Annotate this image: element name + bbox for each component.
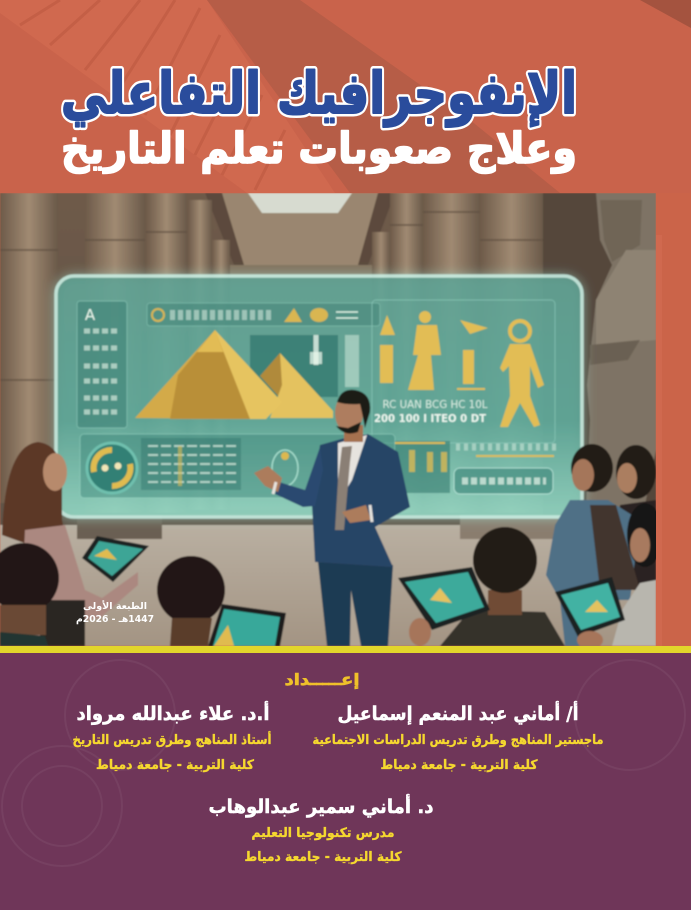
- title line 1 heavy fill: الإنفوجرافيك التفاعلي: [61, 61, 577, 128]
- student: boy bottom left: [0, 543, 59, 646]
- temple background: [0, 193, 544, 526]
- hair and beard: [336, 390, 370, 434]
- author 3: [208, 794, 434, 865]
- shirt: [336, 434, 368, 488]
- small glyph column: [310, 335, 359, 387]
- hieroglyph figures panel: [372, 300, 555, 443]
- left data column: [77, 301, 127, 428]
- student: boy centre with tablet: [157, 556, 286, 646]
- pedestal shadows: [77, 515, 563, 539]
- trousers: [318, 562, 393, 646]
- circular gauge: [87, 443, 137, 493]
- edition note: الطبعة الأولى: [83, 600, 147, 612]
- author 2: كلية التربية - جامعة دمياط: [96, 758, 254, 773]
- title: [61, 61, 577, 174]
- author 1: [312, 701, 604, 773]
- author 1: كلية التربية - جامعة دمياط: [380, 758, 538, 773]
- table of numbers: [374, 398, 488, 425]
- left data column: A: [85, 306, 96, 324]
- tablet left: [82, 536, 149, 582]
- head: [334, 401, 364, 428]
- bottom strip right: [395, 441, 556, 494]
- students: right group with tablet: [546, 444, 663, 649]
- glowing holographic screen: [54, 275, 584, 519]
- left arm pointing: [275, 447, 323, 507]
- illustration: teacher in Egyptian temple: [0, 193, 663, 649]
- author 2: [72, 701, 272, 773]
- title line 2: وعلاج صعوبات تعلم التاريخ: [61, 124, 577, 174]
- neck: [344, 425, 363, 442]
- pointing hand: [254, 466, 282, 492]
- student: girl left with tablet: [2, 442, 138, 646]
- author 3: كلية التربية - جامعة دمياط: [244, 850, 402, 865]
- lower hand: [342, 505, 371, 523]
- author 3: مدرس تكنولوجيا التعليم: [252, 826, 394, 841]
- large and small gold pyramids: [135, 330, 333, 419]
- jacket: [312, 434, 410, 567]
- floor: [0, 525, 656, 646]
- yellow divider band: [0, 646, 691, 653]
- author 2: أستاذ المناهج وطرق تدريس التاريخ: [72, 731, 272, 748]
- gold Egyptian figures: [380, 311, 544, 427]
- top strip: [147, 303, 380, 326]
- author 3: د. أماني سمير عبدالوهاب: [208, 794, 434, 818]
- table of numbers: RC UAN BCG HC 10L: [382, 398, 488, 411]
- edition note: 1447هـ - 2026م: [76, 614, 154, 625]
- title line 1: الإنفوجرافيك التفاعلي: [61, 61, 577, 128]
- student: boy right with tablet: [398, 527, 565, 646]
- table of numbers: 200 100 I ITEO 0 DT: [374, 412, 486, 425]
- author 1: أ/ أماني عبد المنعم إسماعيل: [338, 701, 578, 725]
- dark inset behind small pyramid: [250, 335, 338, 397]
- teacher: [254, 390, 410, 646]
- purple authors panel: [0, 653, 691, 910]
- bottom strip left with gauge: [80, 434, 395, 498]
- cuffs: [273, 482, 372, 522]
- edition note: [76, 600, 154, 625]
- prepared by label: إعـــــداد: [284, 670, 360, 689]
- author 2: أ.د. علاء عبدالله مرواد: [76, 701, 270, 725]
- author 1: ماجستير المناهج وطرق تدريس الدراسات الاجتماعية: [312, 733, 604, 748]
- tie: [335, 446, 352, 530]
- pharaoh statue: [543, 193, 656, 533]
